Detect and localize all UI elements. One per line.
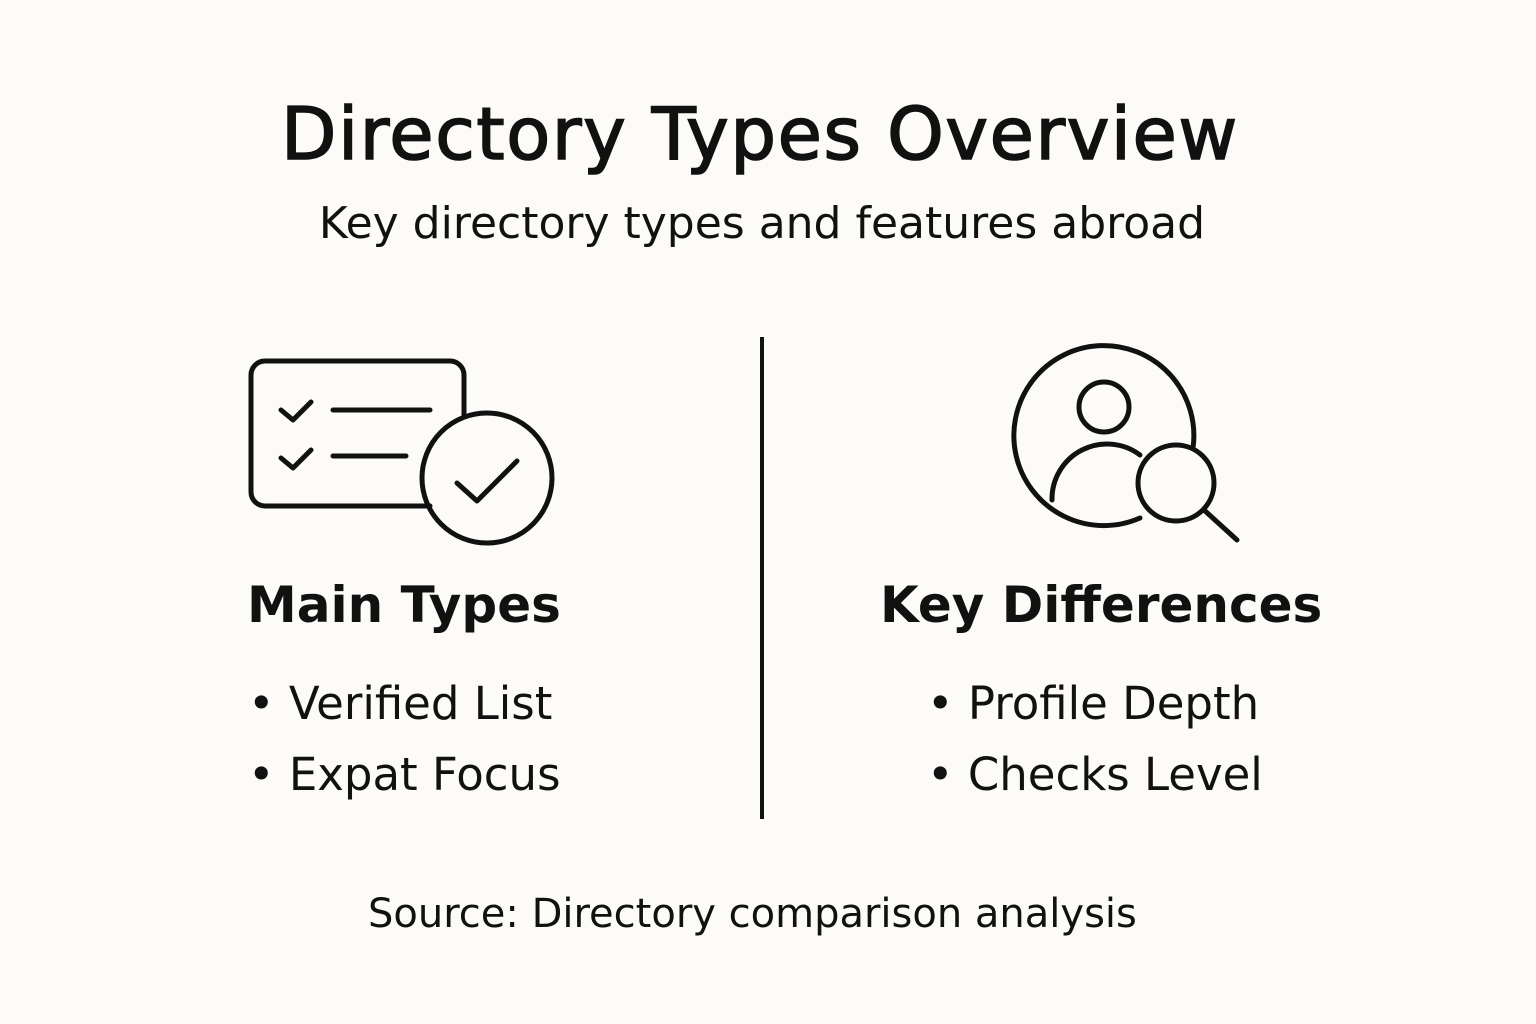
list: main types	[248, 677, 561, 801]
list: main types: • Expat Focus	[248, 748, 561, 801]
heading: Main Types: Main Types	[247, 576, 561, 634]
subtitle: Key directory types and features abroad	[319, 198, 1205, 249]
list: key differences	[927, 677, 1263, 801]
divider line	[760, 337, 764, 819]
title: Directory Types Overview	[281, 92, 1239, 176]
list: key differences: • Profile Depth	[927, 677, 1259, 730]
source note: Source: Directory comparison analysis	[368, 891, 1137, 937]
list: main types: • Verified List	[248, 677, 552, 730]
icon: person with magnifier	[1011, 343, 1240, 542]
heading: Key Differences: Key Differences	[880, 576, 1322, 634]
list: key differences: • Checks Level	[927, 748, 1263, 801]
icon: checklist with check circle	[248, 358, 554, 546]
